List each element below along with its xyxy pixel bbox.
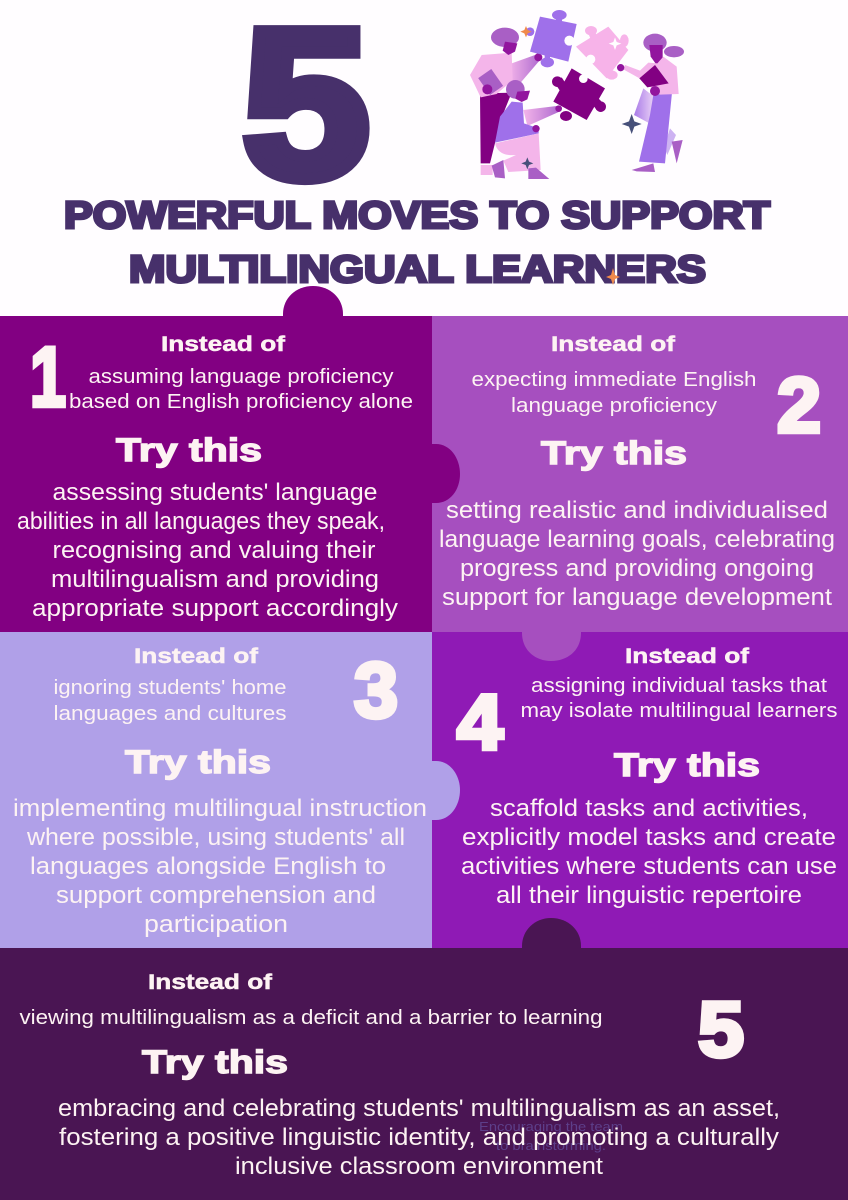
icon: dark puzzle piece bbox=[552, 68, 606, 121]
panel 2 bbox=[432, 316, 848, 632]
heading: try this: Try this bbox=[116, 432, 262, 468]
figure: right standing person bbox=[617, 34, 684, 172]
text: instead of 2: language proficiency bbox=[511, 395, 717, 417]
text: try this 1: assessing students' language bbox=[52, 479, 378, 506]
text: try this 1: multilingualism and providing bbox=[51, 566, 379, 593]
figure: crouching person bbox=[492, 80, 562, 179]
text: try this 1: appropriate support accordingly bbox=[32, 595, 398, 622]
text: try this 3: implementing multilingual instruction bbox=[13, 795, 427, 822]
text: instead of 4 bbox=[520, 675, 838, 722]
text: try this 3: participation bbox=[144, 911, 288, 938]
number 4: 4 bbox=[457, 678, 503, 766]
text: try this 2: language learning goals, celebrating bbox=[439, 526, 835, 553]
text: try this 5: fostering a positive linguistic identity, and promoting a culturally bbox=[59, 1124, 779, 1151]
number 5: 5 bbox=[698, 985, 744, 1073]
panel 3 bbox=[0, 632, 460, 948]
puzzle knob: top of panel 1 bbox=[283, 286, 343, 317]
text: try this 3: where possible, using students' all bbox=[26, 824, 405, 851]
text: instead of 1 bbox=[69, 366, 413, 413]
text: instead of 2: expecting immediate English bbox=[472, 369, 756, 391]
text: try this 2: progress and providing ongoing bbox=[460, 555, 814, 582]
text: try this 3: support comprehension and bbox=[56, 882, 376, 909]
panel 5 bbox=[0, 918, 848, 1200]
faint text: brainstorming note: to brainstorming. bbox=[496, 1138, 606, 1153]
heading: instead of: Instead of bbox=[148, 970, 273, 994]
icon: white sparkle bbox=[609, 37, 621, 50]
text: try this 1: recognising and valuing their bbox=[52, 537, 376, 564]
number 2: 2 bbox=[777, 361, 821, 449]
text: try this 3: languages alongside English to bbox=[30, 853, 386, 880]
text: try this 4 bbox=[461, 795, 837, 909]
text: instead of 1: assuming language proficiency bbox=[88, 366, 394, 388]
text: instead of 4: assigning individual tasks that bbox=[531, 675, 827, 697]
heading: instead of: Instead of bbox=[551, 332, 676, 356]
heading: try this: Try this bbox=[125, 744, 271, 780]
text: instead of 3: languages and cultures bbox=[54, 703, 286, 725]
text: instead of 1: based on English proficiency alone bbox=[69, 391, 413, 413]
heading: instead of: Instead of bbox=[134, 644, 259, 668]
text: try this 2: support for language development bbox=[442, 584, 832, 611]
heading: try this: Try this bbox=[142, 1044, 288, 1080]
panel 1 bbox=[0, 316, 460, 632]
text: try this 4: activities where students can use bbox=[461, 853, 837, 880]
title bbox=[64, 195, 770, 291]
text: try this 4: scaffold tasks and activities, bbox=[490, 795, 808, 822]
text: instead of 3 bbox=[54, 677, 286, 725]
text: instead of 2 bbox=[472, 369, 756, 417]
heading: try this: Try this bbox=[614, 747, 760, 783]
figure: left standing person bbox=[470, 28, 542, 175]
text: try this 3 bbox=[13, 795, 427, 938]
panel 4 bbox=[432, 632, 848, 948]
text: try this 5: embracing and celebrating students' multilingualism as an asset, bbox=[58, 1095, 780, 1122]
text: try this 4: all their linguistic repertoire bbox=[496, 882, 802, 909]
text: instead of 5: viewing multilingualism as a deficit and a barrier to learning bbox=[20, 1007, 602, 1029]
text: try this 2 bbox=[439, 497, 835, 611]
puzzle knob: bottom of panel 2 bbox=[522, 632, 581, 661]
puzzle knob: right of panel 1 bbox=[432, 444, 460, 503]
puzzle knob: right of panel 3 bbox=[432, 761, 460, 820]
heading: instead of: Instead of bbox=[625, 644, 750, 668]
text: try this 4: explicitly model tasks and create bbox=[462, 824, 836, 851]
faint text: brainstorming note: Encouraging the team bbox=[479, 1119, 623, 1134]
icon: orange sparkle bbox=[520, 26, 532, 37]
icon: pink puzzle piece bbox=[576, 26, 629, 80]
icon: lilac puzzle piece bbox=[526, 10, 577, 67]
text: try this 2: setting realistic and individualised bbox=[446, 497, 828, 524]
text: instead of 4: may isolate multilingual learners bbox=[520, 700, 838, 722]
text: try this 1 bbox=[17, 479, 398, 622]
text: try this 5: inclusive classroom environment bbox=[235, 1153, 603, 1180]
text: try this 5 bbox=[58, 1095, 780, 1180]
icon: navy sparkle right bbox=[622, 114, 642, 134]
icon: navy sparkle left bbox=[521, 157, 533, 169]
number 3: 3 bbox=[354, 646, 398, 734]
title: MULTILINGUAL LEARNERS bbox=[129, 249, 706, 291]
number 1: 1 bbox=[30, 330, 66, 424]
icon: orange sparkle bbox=[606, 268, 620, 285]
faint text: brainstorming note bbox=[479, 1119, 623, 1153]
heading: instead of: Instead of bbox=[161, 332, 286, 356]
title: POWERFUL MOVES TO SUPPORT bbox=[64, 195, 770, 237]
puzzle knob: top of panel 5 bbox=[522, 918, 581, 948]
text: try this 1: abilities in all languages they speak, bbox=[17, 508, 385, 535]
heading: try this: Try this bbox=[541, 435, 687, 471]
text: instead of 3: ignoring students' home bbox=[54, 677, 286, 699]
illustration: team assembling puzzle pieces bbox=[470, 10, 684, 179]
